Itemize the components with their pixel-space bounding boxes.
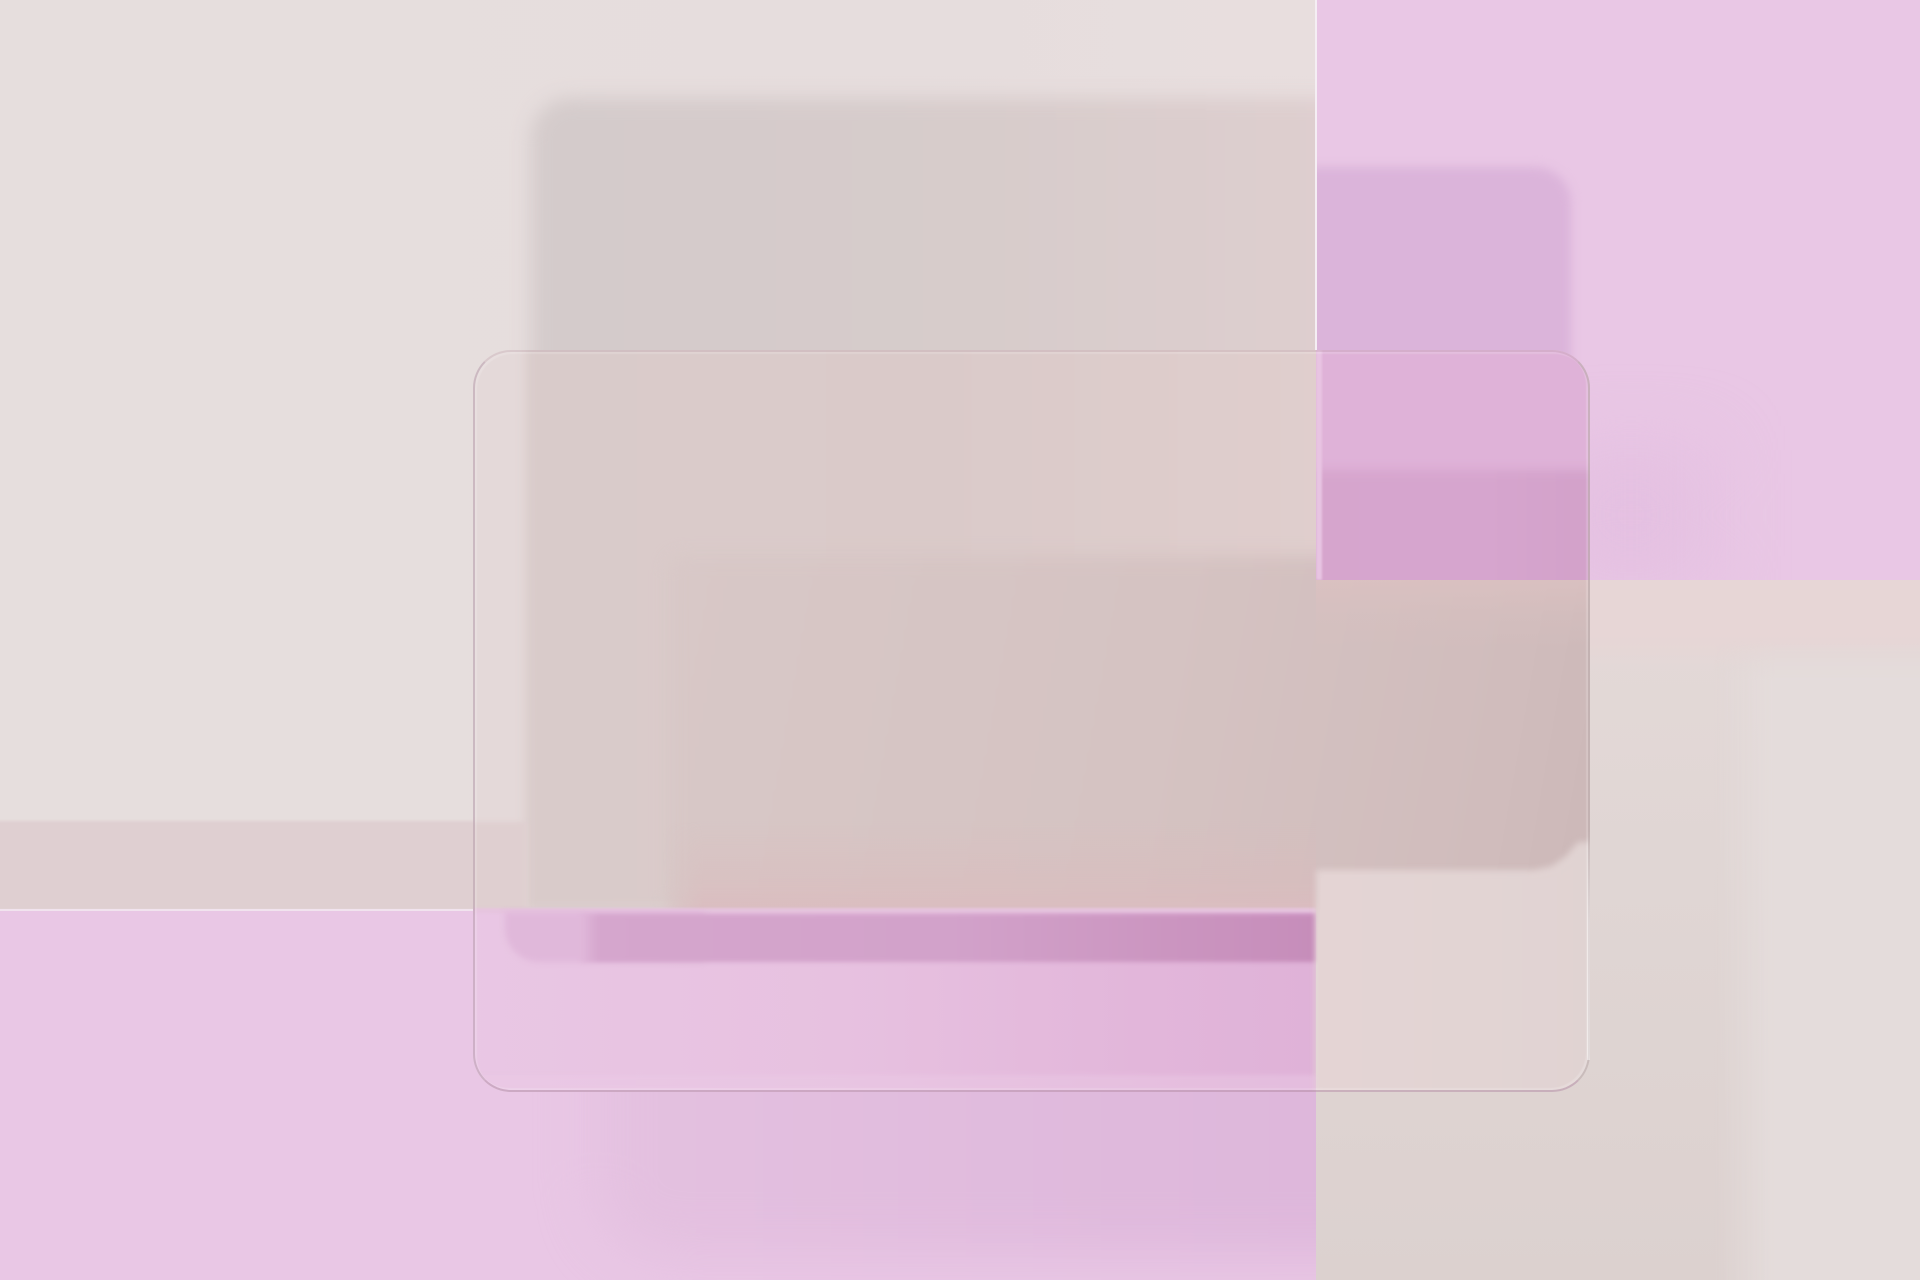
- glass: light lower rim: [473, 1075, 1316, 1090]
- glass: seam glow above dark band: [473, 908, 1316, 913]
- glass: pink lower section: [453, 910, 1316, 1110]
- shadow: soft glow below glass on pink tile: [1556, 450, 1706, 580]
- glass: tile shape with rounded notch: [1316, 842, 1596, 1100]
- glass edge: bevelled outline: [473, 350, 1590, 1092]
- glass: dark magenta band: [581, 914, 1316, 962]
- panel: bottom-left pink tile: [0, 910, 1316, 1280]
- panel: bottom-right beige tile: [1316, 580, 1920, 1280]
- shadow: soft shadow below glass: [595, 850, 1495, 1255]
- shadow: upper strip on beige tile: [1376, 580, 1920, 670]
- shadow: large shadow on beige tile: [531, 98, 1431, 998]
- glass edge: lower right highlight: [1587, 830, 1590, 1060]
- glass: highlight along tile edge: [1316, 350, 1322, 580]
- glass: upper refracted shadow: [526, 320, 1346, 910]
- panel: frosted glass card: [473, 350, 1590, 1092]
- glass: lower left band: [453, 822, 527, 922]
- panel: top-right pink tile: [1316, 0, 1920, 580]
- glass: pink upper right tile: [1316, 350, 1590, 580]
- glass: rosy band below pink tile: [1316, 580, 1590, 650]
- glass: dark band left corner: [505, 912, 705, 962]
- glass: darker lower band: [1306, 470, 1600, 600]
- glass: inner dark panel: [668, 556, 1628, 910]
- line: horizontal seam highlight: [0, 909, 473, 911]
- panel: top-left beige tile: [0, 0, 1316, 910]
- glass: rosy lower edge of inner panel: [690, 892, 1244, 908]
- glass: lower right light tile: [1312, 840, 1590, 1090]
- shadow: lighter right column: [1752, 906, 1920, 1280]
- line: vertical seam highlight: [1315, 0, 1317, 350]
- shadow: left band on beige tile: [0, 821, 530, 910]
- shadow: shadow on pink tile: [1276, 167, 1571, 567]
